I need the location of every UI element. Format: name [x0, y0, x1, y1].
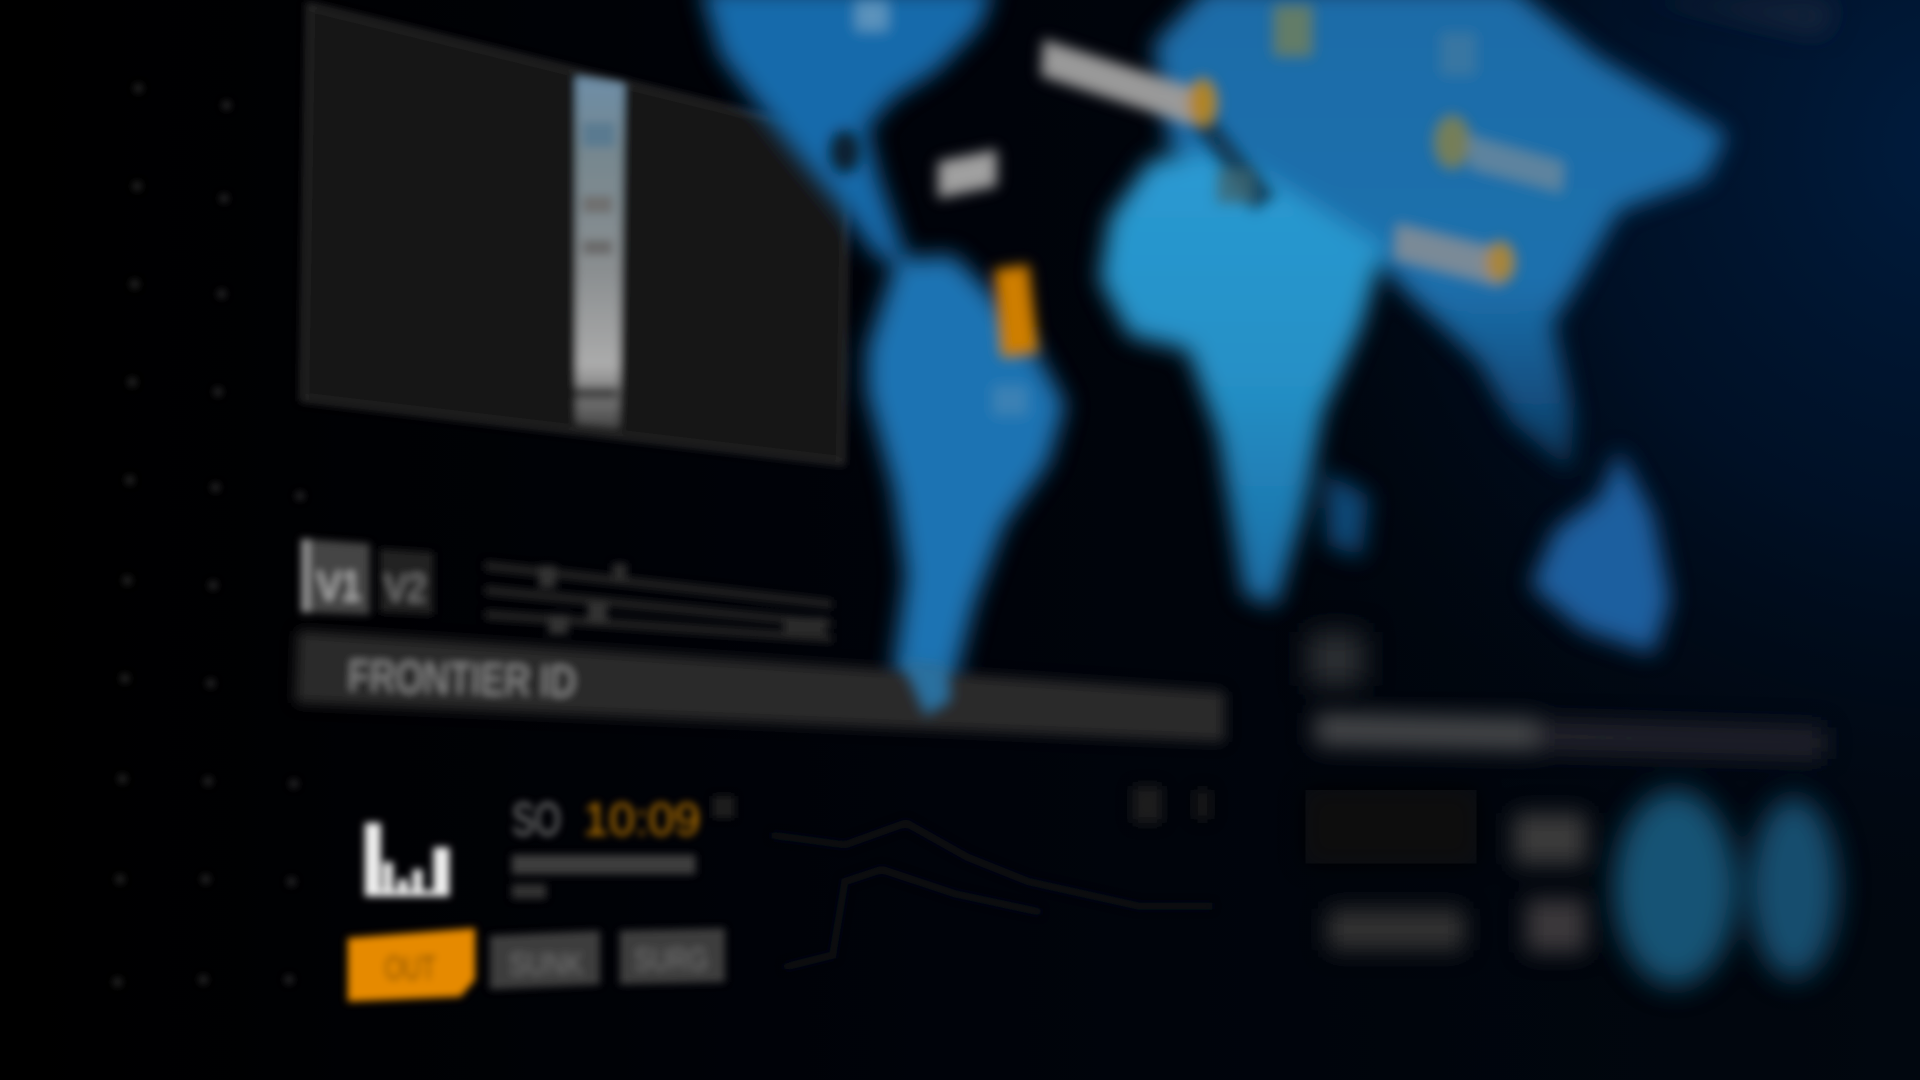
right panel blue gauges	[1614, 790, 1838, 986]
mini data rows	[485, 561, 833, 643]
background dot grid	[114, 84, 304, 986]
button: grey two: SURG	[634, 941, 708, 977]
callout: middle east marker	[1217, 169, 1254, 203]
map: africa	[1100, 154, 1384, 606]
gauge: left	[1614, 790, 1736, 986]
stat: bottom value	[1526, 899, 1587, 953]
south america tip over bar	[901, 659, 950, 715]
callout: india label and marker	[1393, 223, 1515, 287]
stat: bottom label	[1327, 909, 1464, 950]
callout: south america orange marker	[994, 264, 1038, 358]
map: south america	[867, 255, 1065, 716]
chart: vertical stacked bar	[576, 76, 624, 429]
map: madagascar	[1325, 471, 1369, 557]
stat: unit	[713, 796, 735, 818]
callouts on map	[855, 0, 1565, 416]
callout: north america label	[855, 0, 889, 32]
button: grey two	[620, 928, 725, 984]
tab: V2: V2	[384, 567, 426, 610]
map: mediterranean shadow	[1190, 116, 1276, 211]
right edge haze	[1629, 0, 1837, 37]
callout: asia marker and label	[1434, 115, 1565, 193]
heading bar: frontier id	[295, 631, 1224, 742]
stats: value block	[512, 793, 735, 899]
map: australia	[1531, 451, 1670, 654]
gauge: right	[1750, 797, 1838, 978]
button: orange: OUT	[384, 950, 436, 988]
callout: russia marker	[1273, 5, 1313, 56]
stat: orange value: 10:09	[583, 793, 700, 845]
stat: top value	[1513, 813, 1587, 864]
callout: brazil label	[992, 384, 1029, 416]
button: grey one	[490, 931, 600, 989]
right panel small label	[1308, 632, 1364, 686]
heading text: FRONTIER ID	[347, 652, 576, 707]
icon: bar chart	[365, 823, 449, 896]
button: orange	[348, 928, 475, 1002]
stat: caption	[512, 855, 696, 874]
panel: chart frame	[302, 5, 847, 463]
world map	[700, 0, 1727, 716]
map: europe and asia	[1153, 0, 1727, 471]
stat: label: SO	[512, 793, 561, 845]
map: north america	[700, 0, 994, 264]
tab: V1: V1	[317, 562, 361, 609]
line chart: faint trace	[771, 823, 1212, 967]
callout: europe label	[1041, 39, 1194, 125]
callout: europe marker	[1188, 78, 1217, 127]
callout: atlantic label	[938, 149, 997, 198]
button: grey one: SUNK	[509, 946, 583, 982]
stat: dim left column	[1305, 790, 1477, 863]
right panel stats	[1305, 790, 1587, 953]
version tabs	[301, 539, 433, 615]
heading bar: right panel	[1313, 713, 1824, 759]
map: dark spot in central america	[829, 130, 861, 174]
callout: siberia label	[1440, 32, 1477, 76]
line chart: axis label	[1133, 786, 1211, 823]
